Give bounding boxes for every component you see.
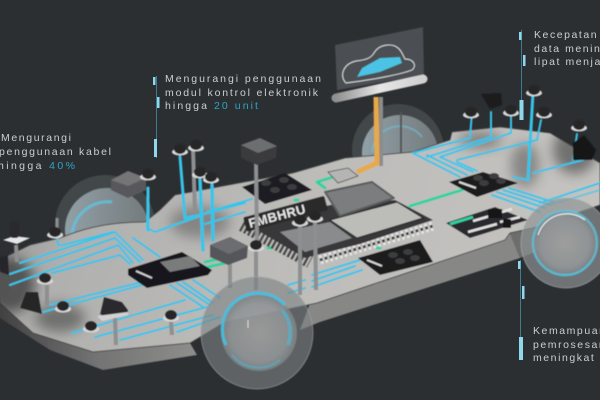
shelf	[336, 79, 423, 98]
module: slider board	[446, 207, 528, 238]
upper grey chip	[325, 182, 394, 216]
chip marking	[243, 196, 328, 232]
cloud panel	[335, 27, 424, 98]
callout text: meningkat	[533, 352, 595, 364]
tall pin with box	[241, 138, 277, 290]
callout line	[518, 260, 524, 360]
platform side walls	[0, 228, 540, 370]
grey box module	[210, 237, 248, 288]
car in cloud	[357, 57, 402, 77]
front wheel	[201, 277, 313, 389]
callout text: Kecepatan	[534, 29, 598, 41]
centre front pins	[292, 211, 323, 295]
callout: processing capability	[518, 260, 600, 364]
callout: cable reduction: penggunaan kabel	[0, 146, 112, 158]
surface shading	[0, 126, 597, 332]
callout text: modul kontrol elektronik	[165, 87, 319, 99]
pins and posts: left group	[172, 140, 219, 250]
rear pins	[463, 85, 596, 160]
callout text: Mengurangi penggunaan	[165, 73, 322, 85]
main dark package	[248, 200, 433, 258]
callout: control modules	[153, 73, 327, 158]
module: lower right	[358, 240, 433, 275]
chip leads	[242, 225, 433, 262]
small chip under cloud post	[328, 168, 358, 183]
callout: data speed	[519, 29, 600, 120]
platform top surface	[0, 127, 600, 352]
callout line	[519, 30, 526, 120]
green traces	[205, 177, 473, 267]
cloud outline	[343, 45, 414, 83]
rear-left wheel arch	[352, 104, 444, 196]
rear wheel	[521, 198, 600, 288]
callout: cable reduction: hingga 40%	[0, 160, 76, 172]
module: front-left	[128, 252, 212, 288]
module: upper centre	[242, 173, 312, 204]
callout line	[153, 76, 160, 158]
orange cloud link	[357, 97, 381, 172]
front-left pins	[0, 218, 179, 345]
box on arch	[111, 169, 156, 230]
rear cyan traces	[288, 93, 600, 293]
front-left cyan traces	[10, 190, 252, 340]
central processor chips	[242, 182, 433, 262]
callout: cable reduction: Mengurangi	[1, 132, 72, 144]
front-left wheel arch	[55, 175, 155, 275]
chip silver lid	[330, 202, 423, 238]
module: upper right	[449, 172, 518, 197]
callout text: hingga 20 unit	[165, 100, 259, 112]
chip marking: FMBHRU	[247, 201, 308, 231]
